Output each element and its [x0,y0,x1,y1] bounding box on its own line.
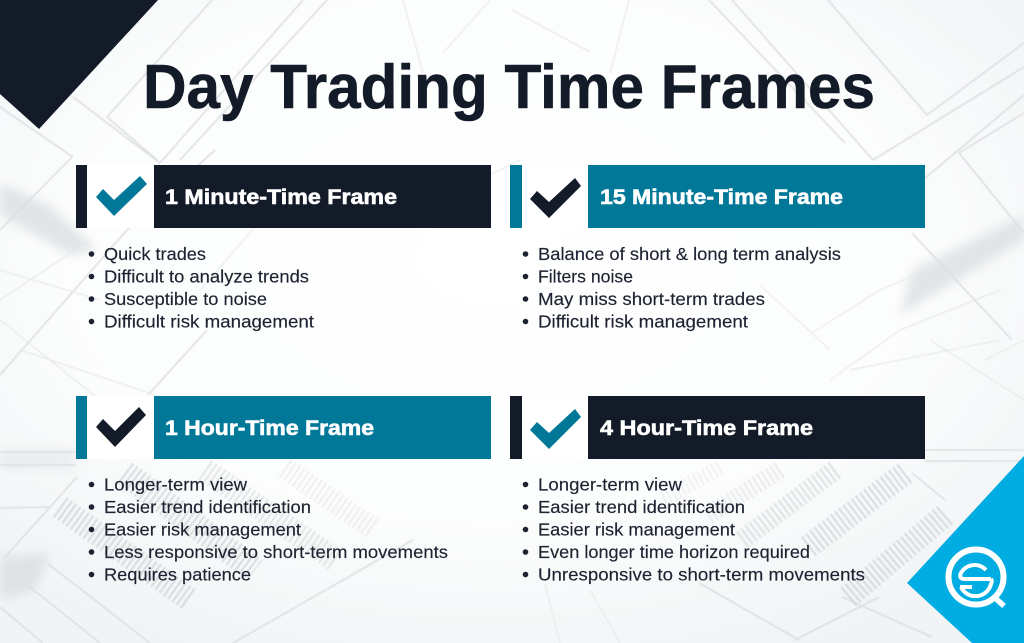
bullet list: Difficult risk management [538,312,748,332]
corner: top-left navy triangle [0,0,158,129]
bullet list: Longer-term view [104,474,247,494]
bullet list: Longer-term view [538,474,682,494]
bullet list: May miss short-term trades [538,289,765,309]
panel: 4 hour time frame [510,396,925,584]
title: Day Trading Time Frames [143,53,875,122]
bullet list: Easier trend identification [104,497,311,517]
bullet list: Even longer time horizon required [538,542,810,562]
bullet list: Requires patience [104,564,251,584]
bullet list: Easier risk management [538,520,735,540]
bullet list: Less responsive to short-term movements [104,542,448,562]
bullet list: Balance of short & long term analysis [538,244,841,264]
icon: check mark [96,407,146,447]
bullet list: Filters noise [538,266,633,286]
icon: check mark [530,178,581,218]
bullet list: Easier trend identification [538,497,745,517]
bullet list: Unresponsive to short-term movements [538,564,865,584]
icon: logo [948,550,1004,606]
panel: 1 minute time frame [76,165,491,332]
bullet list [523,244,841,332]
bullet list [523,474,865,584]
icon: check mark [530,409,581,449]
panel: 15 minute time frame [510,165,925,332]
heading: 1 Minute-Time Frame [165,186,397,209]
bullet list: Difficult to analyze trends [104,266,309,286]
header bar [510,396,925,459]
header bar [76,396,491,459]
corner: bottom-right cyan triangle with logo [907,456,1024,643]
bullet list: Quick trades [104,244,206,264]
header bar [76,165,491,228]
heading: 1 Hour-Time Frame [165,417,374,440]
bullet list: Easier risk management [104,520,301,540]
bullet list: Difficult risk management [104,312,314,332]
icon: check mark [96,176,147,216]
heading: 15 Minute-Time Frame [600,186,843,209]
heading: 4 Hour-Time Frame [600,417,813,440]
header bar [510,165,925,228]
bullet list [89,244,314,332]
bullet list: Susceptible to noise [104,289,267,309]
bullet list [89,474,448,584]
panel: 1 hour time frame [76,396,491,584]
